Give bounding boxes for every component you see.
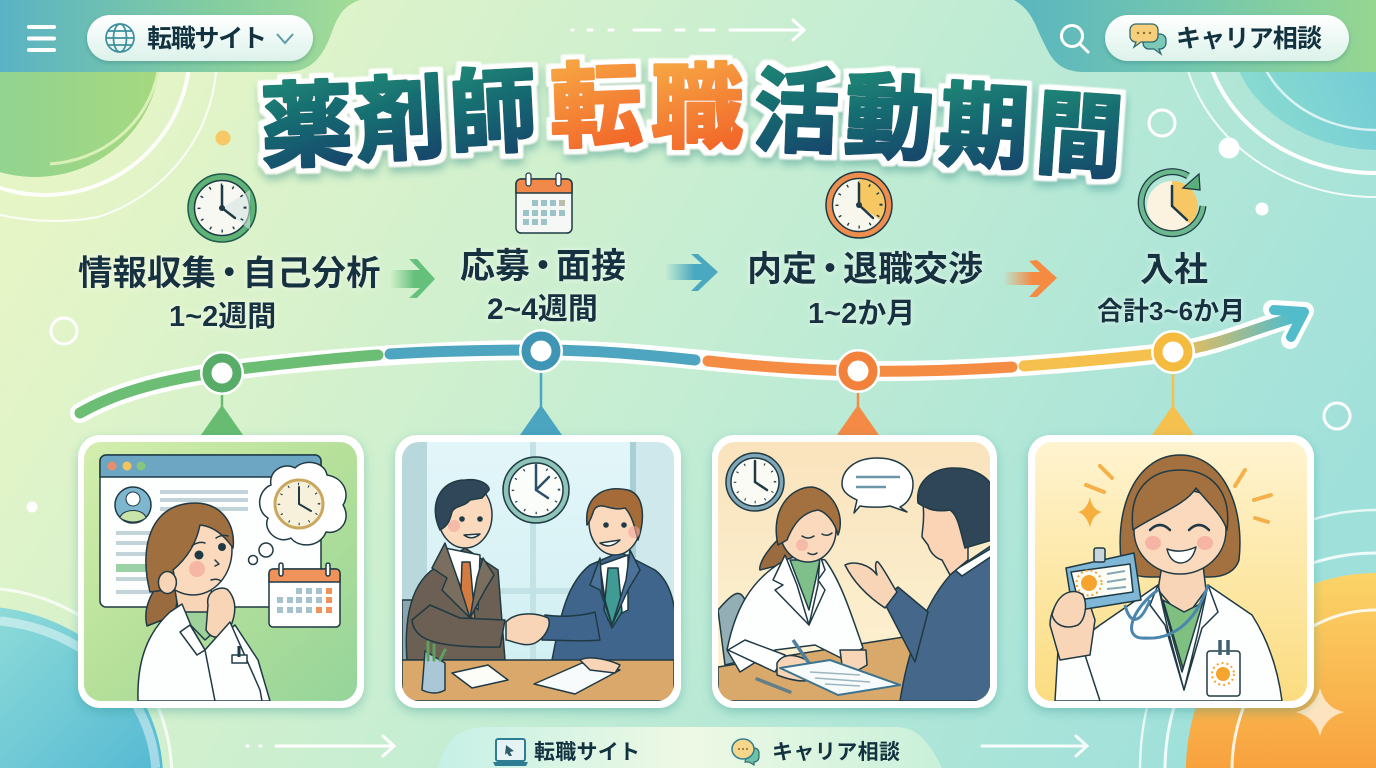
sparkles <box>1078 466 1271 528</box>
header bar: left <box>0 0 360 72</box>
icon: calendar <box>516 173 572 233</box>
title: 師 <box>447 61 539 167</box>
pharmacist writing <box>718 487 867 682</box>
title: 期 <box>937 75 1031 182</box>
icon: orange clock <box>826 172 892 238</box>
speech bubble <box>842 458 913 513</box>
man left: brown suit <box>402 480 505 665</box>
pharmacist thinking <box>138 503 270 701</box>
step 3: 内定・退職交渉: 1~2か月 <box>808 298 915 330</box>
step 1: 情報収集・自己分析: 情報収集・自己分析 <box>78 255 380 293</box>
wall clock <box>726 453 784 511</box>
bottom navigation tab: 転職サイト <box>534 741 640 764</box>
arrow: green <box>390 259 435 298</box>
title: 間 <box>1033 82 1126 191</box>
icon: chevron <box>277 34 293 43</box>
decorative arrow: bottom left <box>247 736 394 756</box>
desk <box>718 636 990 701</box>
panel 1: researching pharmacist <box>78 435 364 708</box>
man in suit gesturing <box>845 468 992 701</box>
timeline <box>80 309 1305 435</box>
header bar: right <box>1014 0 1376 72</box>
pill: 転職サイト <box>87 15 313 61</box>
thought bubble with clock <box>248 462 346 564</box>
smiling pharmacist <box>1086 454 1283 701</box>
panel 3: resignation negotiation <box>712 435 997 708</box>
title: 動 <box>842 66 936 173</box>
title <box>259 55 1126 191</box>
step 2: 応募・面接 <box>460 173 626 326</box>
bottom navigation tab <box>438 727 942 768</box>
window frame <box>402 442 674 661</box>
step 2: 応募・面接: 応募・面接 <box>460 247 626 286</box>
decorative arrow: top <box>572 20 804 40</box>
pill: キャリア相談: キャリア相談 <box>1176 25 1322 53</box>
title: 活 <box>752 60 840 166</box>
step 4: 入社 <box>1097 172 1245 326</box>
step 1: 情報収集・自己分析 <box>78 174 380 333</box>
icon: clock with return arrow <box>1141 172 1203 234</box>
decorative arrow: bottom right <box>982 736 1087 756</box>
man right: blue suit <box>542 489 676 670</box>
step 4: 入社: 合計3~6か月 <box>1097 296 1245 326</box>
node 4 <box>1151 330 1195 374</box>
pill: 転職サイト: 転職サイト <box>147 25 267 53</box>
icon: search <box>1062 26 1088 52</box>
icon: hamburger menu <box>27 25 56 52</box>
desk <box>402 642 674 701</box>
bottom navigation tab: キャリア相談 <box>772 741 900 764</box>
clipboard and pen <box>757 660 900 695</box>
wall clock <box>503 457 569 523</box>
icon: green clock <box>188 174 256 242</box>
coat pocket with sun badge <box>1207 640 1240 696</box>
hand holding ID card <box>1050 548 1141 701</box>
pill: キャリア相談 <box>1105 15 1349 61</box>
node 1 <box>200 351 244 395</box>
step 3: 内定・退職交渉: 内定・退職交渉 <box>747 250 983 289</box>
icon: laptop <box>493 739 528 766</box>
step 2: 応募・面接: 2~4週間 <box>487 293 598 326</box>
timeline track <box>80 309 1305 413</box>
node 2 <box>519 329 563 373</box>
icon: chat bubbles <box>732 739 759 765</box>
panel 4: first day with ID badge <box>1028 435 1314 708</box>
browser window <box>100 455 321 607</box>
arrow: blue <box>665 254 718 291</box>
step 4: 入社: 入社 <box>1140 251 1208 289</box>
calendar <box>269 563 340 627</box>
arrow: orange <box>1003 260 1057 297</box>
title: 職 <box>651 58 743 160</box>
step 1: 情報収集・自己分析: 1~2週間 <box>169 301 276 333</box>
decorative dots and rings <box>26 110 1350 736</box>
lanyard <box>1125 585 1208 638</box>
step 3: 内定・退職交渉 <box>747 172 983 330</box>
icon: chat bubbles <box>1130 24 1166 54</box>
handshake <box>506 614 549 645</box>
connectors and triangles <box>201 360 1194 435</box>
title: 薬 <box>259 75 355 180</box>
node 3 <box>836 349 880 393</box>
title: 剤 <box>353 67 447 174</box>
panel 2: interview handshake <box>395 435 681 708</box>
icon: globe <box>106 24 134 52</box>
title: 転 <box>548 55 644 160</box>
